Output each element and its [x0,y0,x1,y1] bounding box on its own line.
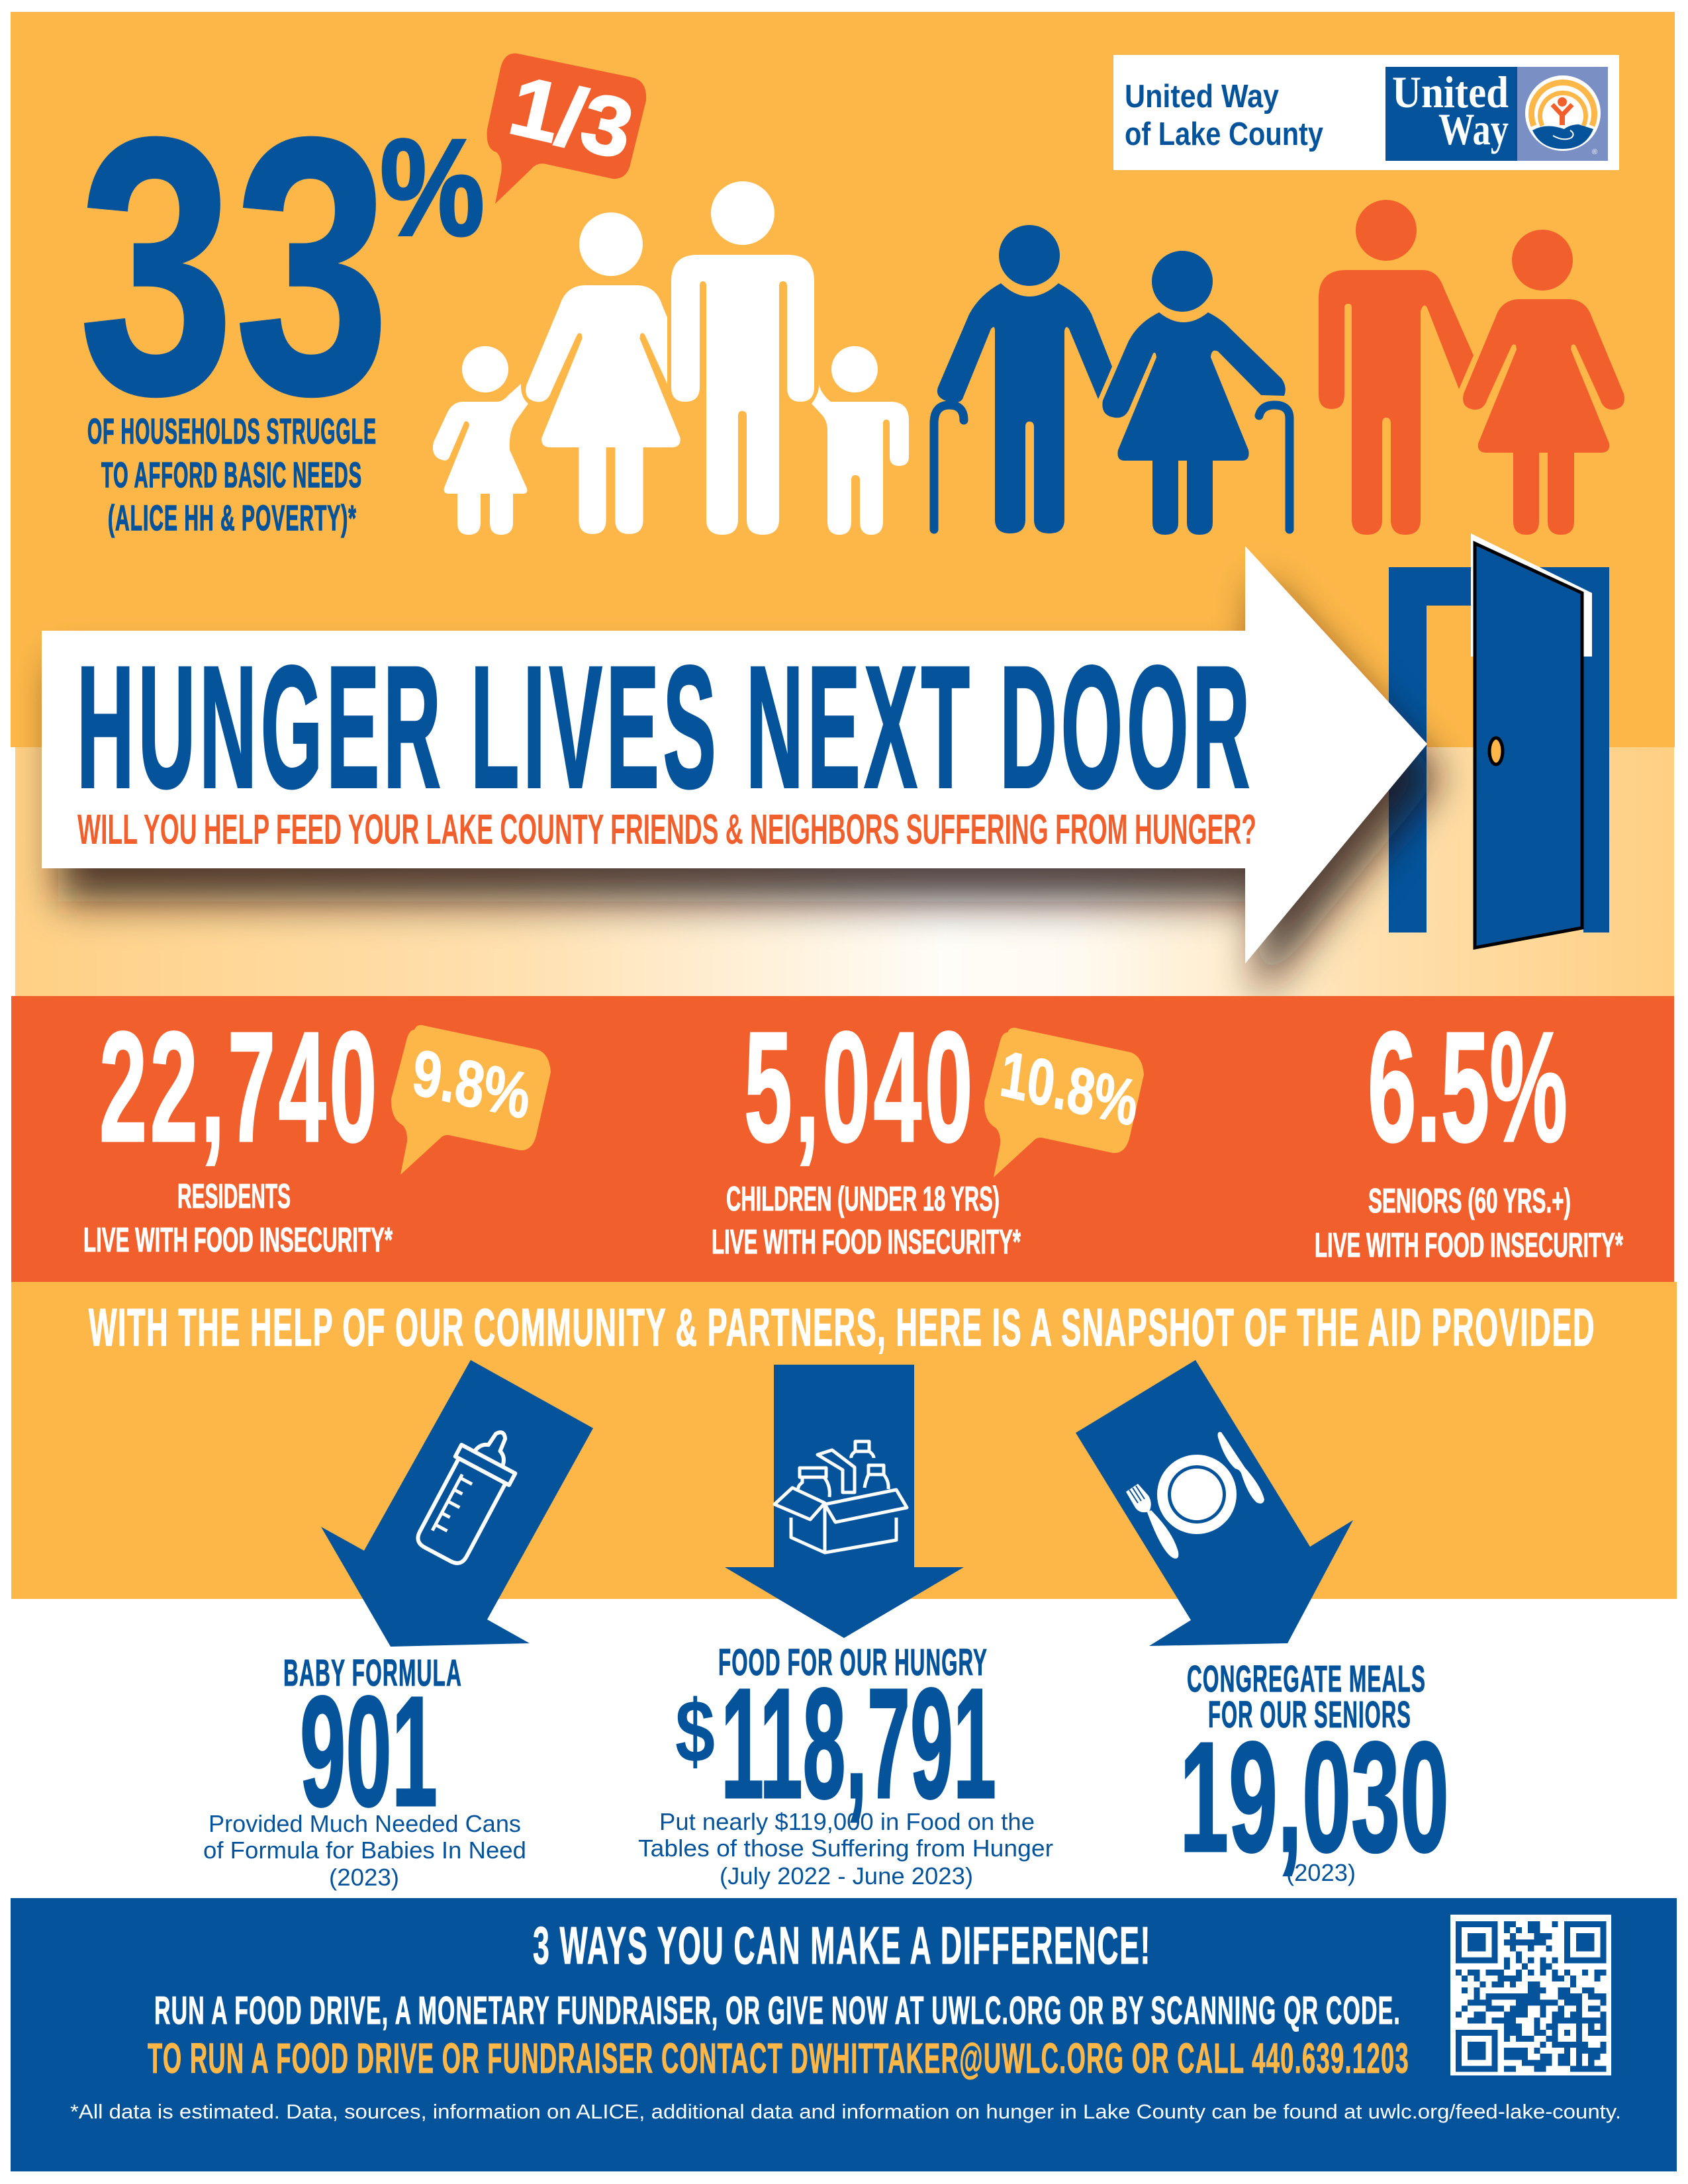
stat: food for our hungry: $ [675,1682,715,1781]
stat: 33 percent of households [79,62,485,538]
stat: baby formula: BABY FORMULA [283,1652,462,1694]
mother [526,212,696,534]
panel: orange food insecurity band [11,996,1674,1282]
stat: food for our hungry: FOOD FOR OUR HUNGRY [718,1641,988,1684]
girl [433,346,528,535]
registered mark: ® [1592,148,1597,156]
stat: congregate meals: (2023) [1286,1859,1356,1886]
stat: children: 5,040 [744,999,976,1175]
stat: congregate meals: FOR OUR SENIORS [1208,1694,1411,1736]
stat: children [712,999,1021,1261]
senior man [934,225,1112,533]
icon: United Way emblem [1525,75,1601,156]
percent sign: % [380,111,485,265]
stat: baby formula: (2023) [329,1864,399,1891]
icon: white family [433,181,909,535]
icon: baby bottle [411,1418,530,1569]
QR code [1450,1915,1611,2075]
icon: plate, fork and knife [1126,1432,1264,1559]
heading: 3 ways: 3 WAYS YOU CAN MAKE A DIFFERENCE! [533,1916,1151,1975]
callout: 1/3 speech bubble: 1/3 [502,58,641,177]
stat: baby formula: of Formula for Babies In Need [203,1837,526,1864]
stat: food for our hungry: Put nearly $119,000 in Food on the [659,1808,1035,1835]
arrow: congregate meals [1076,1360,1353,1646]
icon: orange couple [1319,200,1624,535]
orange man [1319,200,1474,535]
boy [812,346,909,535]
panel: yellow aid snapshot band [11,1282,1677,1599]
stat: residents: RESIDENTS [177,1177,291,1216]
callout: 1/3 speech bubble [487,54,646,204]
households caption: OF HOUSEHOLDS STRUGGLE [87,412,377,451]
stat: baby formula: 901 [300,1664,438,1839]
footnote: *All data is estimated. Data, sources, information on ALICE, additional data and information on hunger in Lake County can be found at uwlc.org/feed-lake-county. [70,2100,1621,2123]
panel: top yellow background [11,12,1675,747]
stat: residents: LIVE WITH FOOD INSECURITY* [83,1221,393,1259]
stat: congregate meals: CONGREGATE MEALS [1187,1658,1426,1700]
stat: baby formula: Provided Much Needed Cans [209,1810,521,1837]
stat: food for our hungry [638,1641,1053,1889]
logo: United Way of Lake County: United Way [1125,79,1279,114]
arrow: food [725,1365,964,1638]
panel: big white arrow banner [42,546,1440,997]
icon: blue senior couple with canes [934,225,1289,535]
panel: pale gradient band [15,747,1674,996]
stat: children: LIVE WITH FOOD INSECURITY* [712,1223,1021,1261]
panel: blue call to action footer [11,1898,1677,2171]
households caption: (ALICE HH & POVERTY)* [108,498,357,538]
icon: open door [1389,533,1609,948]
arrow: baby formula [321,1360,593,1647]
stat: congregate meals [1180,1658,1449,1886]
stat: congregate meals: 19,030 [1180,1709,1449,1885]
stat: baby formula [203,1652,526,1891]
senior woman [1102,251,1289,535]
stat: food for our hungry: Tables of those Suffering from Hunger [638,1835,1053,1862]
stat: food for our hungry: (July 2022 - June 2023) [720,1862,973,1889]
logo: United Way of Lake County: of Lake County [1125,116,1323,152]
stat: seniors [1315,999,1623,1265]
callout: 10.8% bubble [984,1028,1144,1177]
father [671,181,814,535]
logo: United Way of Lake County [1113,55,1619,170]
stat: children: CHILDREN (UNDER 18 YRS) [726,1180,1000,1218]
stat: residents: 22,740 [99,999,380,1175]
stat: residents [83,999,393,1259]
households caption [87,412,377,538]
stat: food for our hungry: 118,791 [721,1656,996,1831]
orange woman [1463,230,1624,535]
logo: United Way of Lake County: Way [1438,104,1509,154]
callout: 9.8% bubble: 9.8% [408,1036,534,1133]
big number 33: 33 [79,62,390,470]
logo: United Way of Lake County: United [1392,67,1509,117]
icon: box of groceries [774,1441,907,1553]
callout: 9.8% bubble [391,1025,551,1175]
callout: 10.8% bubble: 10.8% [996,1037,1142,1140]
households caption: TO AFFORD BASIC NEEDS [101,455,362,495]
